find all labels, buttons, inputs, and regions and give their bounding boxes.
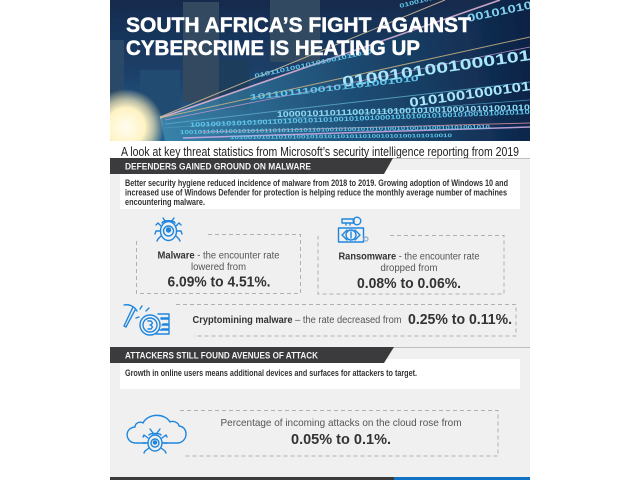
page background panel <box>110 158 530 480</box>
title: CYBERCRIME IS HEATING UP <box>126 36 420 60</box>
hero image: city and binary data streams: 1000010110111001011010010100100010101001010 <box>277 103 531 119</box>
title: SOUTH AFRICA’S FIGHT AGAINST <box>126 13 471 37</box>
hero image: city and binary data streams: 0100101001000101 <box>341 47 532 91</box>
text block: malware intro: encountering malware. <box>125 197 205 207</box>
panel: ransomware <box>318 217 504 294</box>
title <box>126 13 471 60</box>
hero image: city and binary data streams: 1001011010100101010110101101011010010100101010100101001010010101001010 <box>180 125 490 136</box>
text block: attackers intro <box>120 359 520 389</box>
hero image: city and binary data streams: 00101010 <box>466 0 533 25</box>
section header: defenders <box>110 158 530 174</box>
panel: cloud attacks: Percentage of incoming attacks on the cloud rose from <box>220 417 462 429</box>
section header: defenders: DEFENDERS GAINED GROUND ON MALWARE <box>125 162 311 172</box>
panel: cryptomining <box>124 304 516 336</box>
panel: malware: Malware - the encounter rate <box>158 250 280 262</box>
text block: malware intro: increased use of Windows Defender for protection is helping reduce the monthly average number of machines <box>125 188 507 198</box>
panel: malware: 6.09% to 4.51%. <box>168 274 270 290</box>
hero image: city and binary data streams <box>110 0 530 141</box>
text block: malware intro <box>120 170 520 209</box>
hero image: city and binary data streams: 01011010010101001011010 <box>254 49 374 80</box>
hero image: city and binary data streams: 1011011100101101001010 <box>249 74 420 102</box>
text block: malware intro: Better security hygiene reduced incidence of malware from 2018 to 2019. Growing adoption of Windows 10 and <box>125 178 508 188</box>
panel: malware <box>136 218 300 294</box>
panel: cryptomining: Cryptomining malware – the rate decreased from <box>192 315 402 326</box>
footer band <box>110 477 530 480</box>
panel: ransomware: Ransomware - the encounter rate <box>338 252 480 262</box>
panel: ransomware: dropped from <box>380 263 438 274</box>
subtitle: A look at key threat statistics from Microsoft’s security intelligence reporting from 2019 <box>121 145 519 159</box>
hero image: city and binary data streams: 10100101011010100101010110101101001010100101010010 <box>230 133 452 141</box>
icon: key and banknote <box>338 217 368 242</box>
panel: malware: lowered from <box>191 262 246 273</box>
panel: cloud attacks <box>127 410 498 456</box>
hero image: city and binary data streams: 0101001000101 <box>408 78 531 110</box>
hero image: city and binary data streams: 100100101010100110110010110100101001000101010010100101001010010110 <box>190 109 530 129</box>
panel: ransomware: 0.08% to 0.06%. <box>357 276 461 292</box>
section header: attackers <box>110 347 530 363</box>
panel: cryptomining: 0.25% to 0.11%. <box>408 312 512 328</box>
text block: attackers intro: Growth in online users means additional devices and surfaces for attackers to target. <box>125 368 417 378</box>
icon: pickaxe and coin <box>124 305 169 335</box>
icon: bug <box>155 218 182 241</box>
panel: cloud attacks: 0.05% to 0.1%. <box>291 432 391 448</box>
icon: cloud with bug <box>127 415 186 453</box>
section header: attackers: ATTACKERS STILL FOUND AVENUES OF ATTACK <box>125 350 318 362</box>
